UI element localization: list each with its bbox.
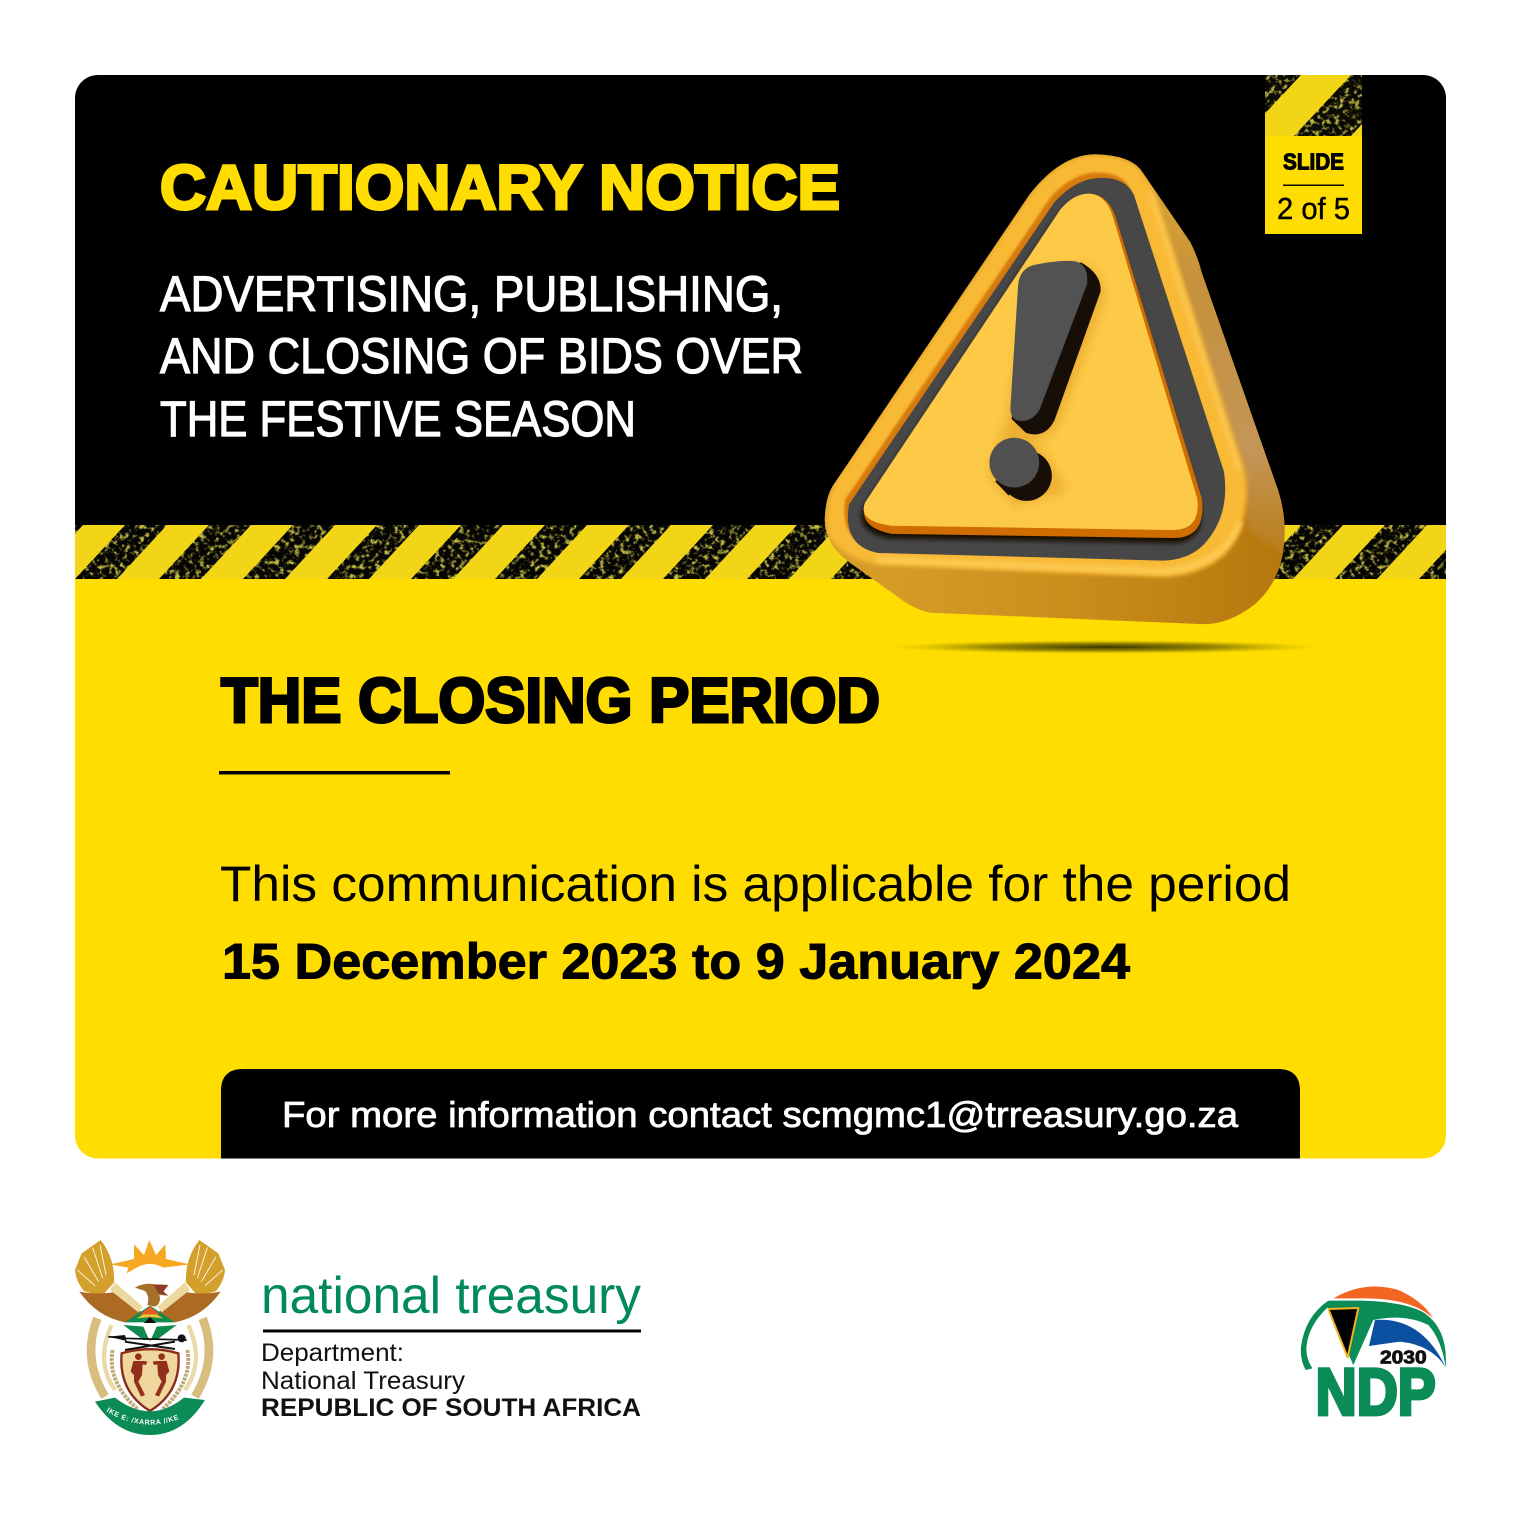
heading: the closing period: THE CLOSING PERIOD: [221, 666, 880, 736]
logo: NDP 2030: [1301, 1286, 1446, 1428]
black header panel: [75, 75, 1446, 526]
contact bar: For more information contact scmgmc1@trreasury.go.za: [282, 1094, 1239, 1135]
subtitle: [160, 266, 803, 447]
shield: [121, 1349, 179, 1411]
inner plate shadow: [862, 199, 1201, 543]
right side face: [1141, 162, 1294, 564]
tusks: [91, 1318, 209, 1397]
blue band: [1369, 1320, 1446, 1367]
sun: [110, 1240, 190, 1273]
inner plate edge: [864, 194, 1202, 538]
exclamation bar: [1010, 261, 1101, 434]
wordmark: national treasury: [261, 1267, 641, 1325]
wheat: [112, 1350, 188, 1410]
bird head: [135, 1284, 168, 1307]
body text: This communication is applicable for the period: [220, 856, 1291, 912]
spear and kerrie: [108, 1334, 187, 1350]
diamond: [125, 1306, 175, 1323]
motto banner: IKE E: /XARRA //KE: [106, 1407, 179, 1425]
heading rule: [219, 771, 450, 774]
green flag band: [1301, 1301, 1446, 1370]
orange arc: [1333, 1286, 1433, 1318]
title: cautionary notice: CAUTIONARY NOTICE: [160, 153, 840, 223]
right rim highlight: [1150, 192, 1240, 472]
front rim: [827, 154, 1247, 577]
slide tag: 2 of 5: [1277, 191, 1350, 226]
dark panel: [848, 178, 1225, 561]
subtitle: ADVERTISING, PUBLISHING,: [160, 266, 783, 322]
2030: 2030: [1380, 1347, 1427, 1368]
triangle body: [825, 154, 1285, 624]
logo: national treasury: Department:: [261, 1339, 404, 1367]
icon: warning triangle: [825, 154, 1294, 624]
rim groove: [844, 173, 1222, 555]
yellow content panel: [75, 579, 1446, 1159]
motto banner: [95, 1398, 205, 1435]
logo: coat of arms: [75, 1240, 225, 1435]
lower rim highlight: [877, 522, 1240, 571]
NDP: NDP: [1316, 1354, 1436, 1428]
slide tag: SLIDE: [1283, 148, 1344, 174]
slide tag: [1265, 75, 1362, 234]
main card: [75, 75, 1446, 1159]
green flag fill: [1347, 1302, 1372, 1365]
exclamation shadow: [988, 263, 1104, 506]
black triangle: [1328, 1308, 1358, 1357]
exclamation dot: [989, 438, 1052, 501]
floor shadow: [887, 640, 1323, 654]
logo: national treasury: National Treasury: [261, 1367, 466, 1395]
subtitle: AND CLOSING OF BIDS OVER: [160, 328, 803, 384]
shaded faces: [827, 154, 1294, 577]
left wing: [75, 1240, 143, 1322]
date range: 15 December 2023 to 9 January 2024: [222, 934, 1130, 990]
right wing: [157, 1240, 225, 1322]
contact bar: [221, 1069, 1300, 1158]
protea: [123, 1325, 177, 1342]
hazard stripe band: [75, 525, 1446, 579]
logo: national treasury: REPUBLIC OF SOUTH AFRICA: [261, 1394, 641, 1422]
subtitle: THE FESTIVE SEASON: [160, 391, 636, 447]
inner plate: [864, 194, 1198, 530]
logo: national treasury: [261, 1267, 641, 1422]
